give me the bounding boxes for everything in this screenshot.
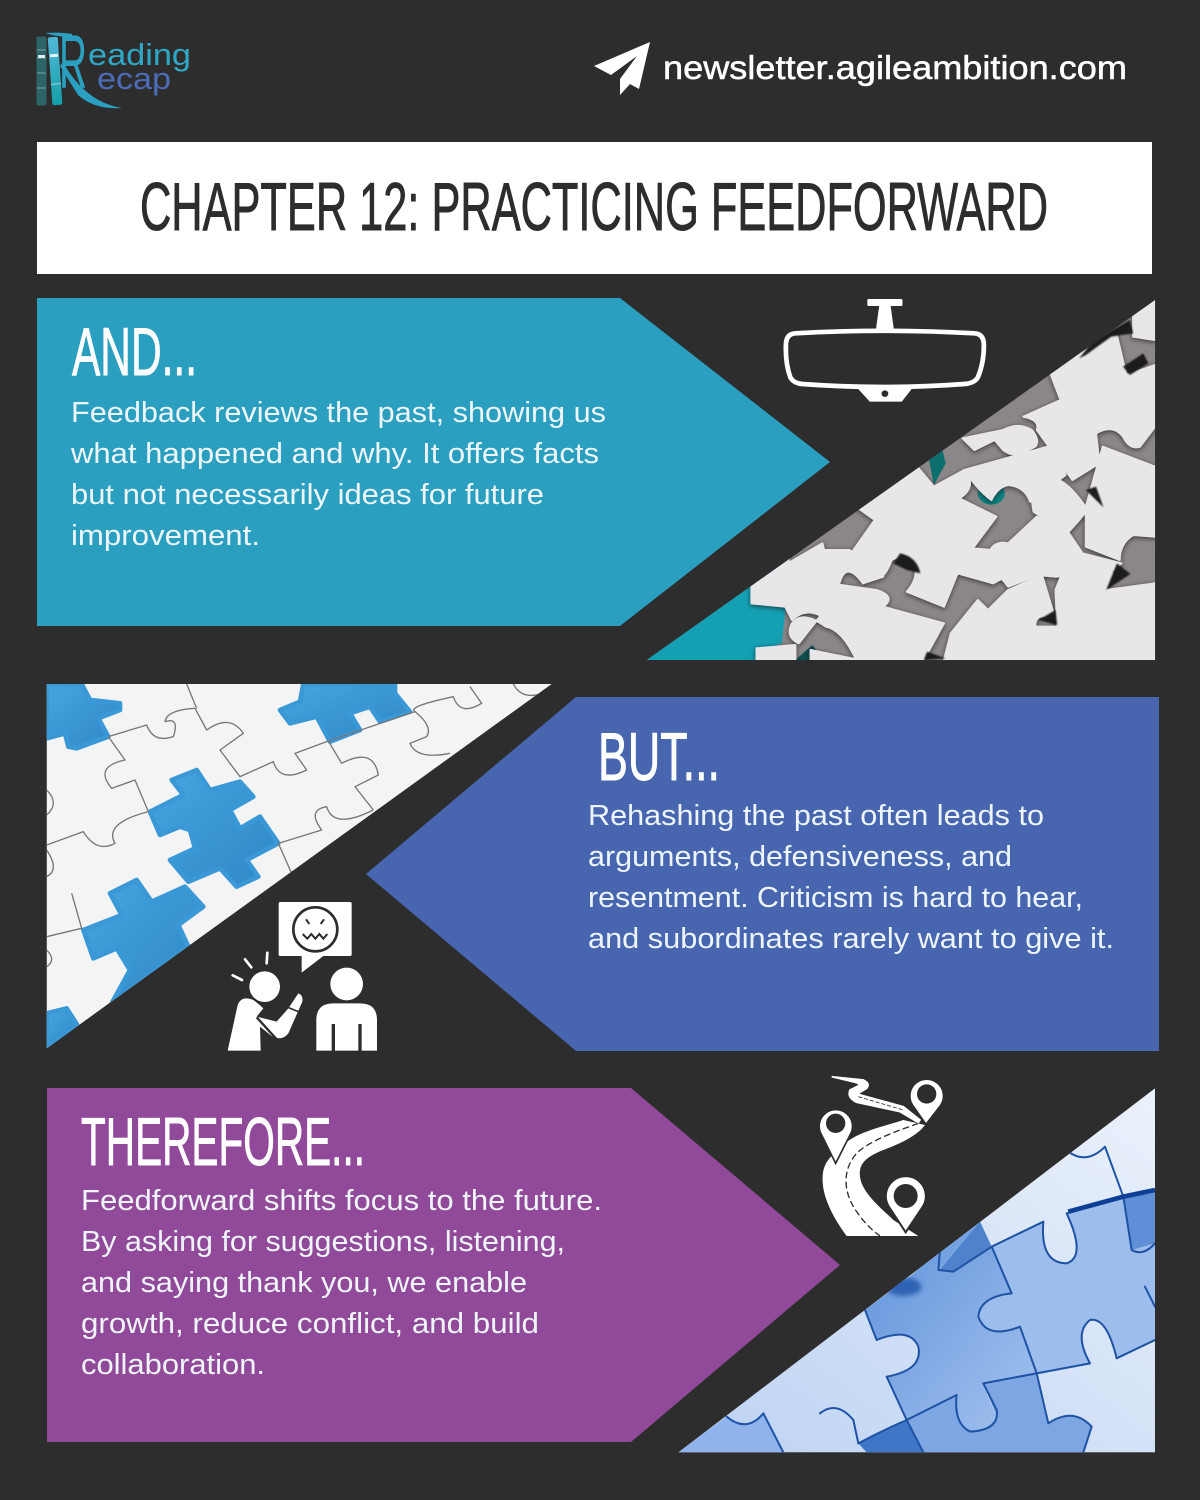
newsletter URL: newsletter.agileambition.com — [663, 49, 1127, 86]
logo: Reading Recap — [36, 20, 191, 108]
body text: AND — [70, 397, 606, 552]
body text: THEREFORE: By asking for suggestions, listening, — [81, 1226, 565, 1258]
icon: paper plane — [594, 42, 650, 95]
icon: books — [36, 36, 62, 106]
logo letter R: R — [59, 20, 87, 105]
body text: THEREFORE — [81, 1185, 602, 1381]
body text: BUT: arguments, defensiveness, and — [588, 841, 1012, 873]
body text: BUT: Rehashing the past often leads to — [588, 800, 1044, 832]
body text: THEREFORE: growth, reduce conflict, and build — [81, 1308, 539, 1340]
body text: BUT: and subordinates rarely want to give it. — [588, 923, 1114, 955]
body text: AND: what happened and why. It offers facts — [70, 438, 599, 470]
body text: AND: but not necessarily ideas for future — [71, 479, 544, 511]
body text: BUT: resentment. Criticism is hard to hear, — [588, 882, 1083, 914]
image: scattered white puzzle pieces — [640, 290, 1160, 663]
heading: THEREFORE: THEREFORE... — [81, 1104, 365, 1180]
image: blue embossed puzzle — [670, 1070, 1163, 1457]
body text: AND: improvement. — [71, 520, 260, 552]
body text: THEREFORE: and saying thank you, we enable — [81, 1267, 527, 1299]
body text: THEREFORE: Feedforward shifts focus to the future. — [81, 1185, 602, 1217]
logo word: eading: eading — [88, 37, 191, 72]
logo word: ecap: ecap — [97, 61, 171, 96]
logo R swash — [45, 33, 122, 108]
panel: BUT — [366, 697, 1159, 1051]
body text: AND: Feedback reviews the past, showing us — [71, 397, 606, 429]
body text: THEREFORE: collaboration. — [81, 1349, 265, 1381]
icon: rearview mirror — [786, 299, 984, 402]
heading: AND: AND... — [72, 314, 197, 390]
panel: THEREFORE — [47, 1088, 840, 1442]
icon: winding road with map pins — [819, 1077, 943, 1236]
body text: BUT — [588, 800, 1114, 955]
image: white puzzle with blue gaps — [40, 680, 560, 1053]
panel: AND — [37, 298, 830, 626]
heading: BUT: BUT... — [598, 719, 720, 795]
title banner — [37, 142, 1152, 274]
icon: two people with angry speech bubble — [228, 902, 377, 1051]
